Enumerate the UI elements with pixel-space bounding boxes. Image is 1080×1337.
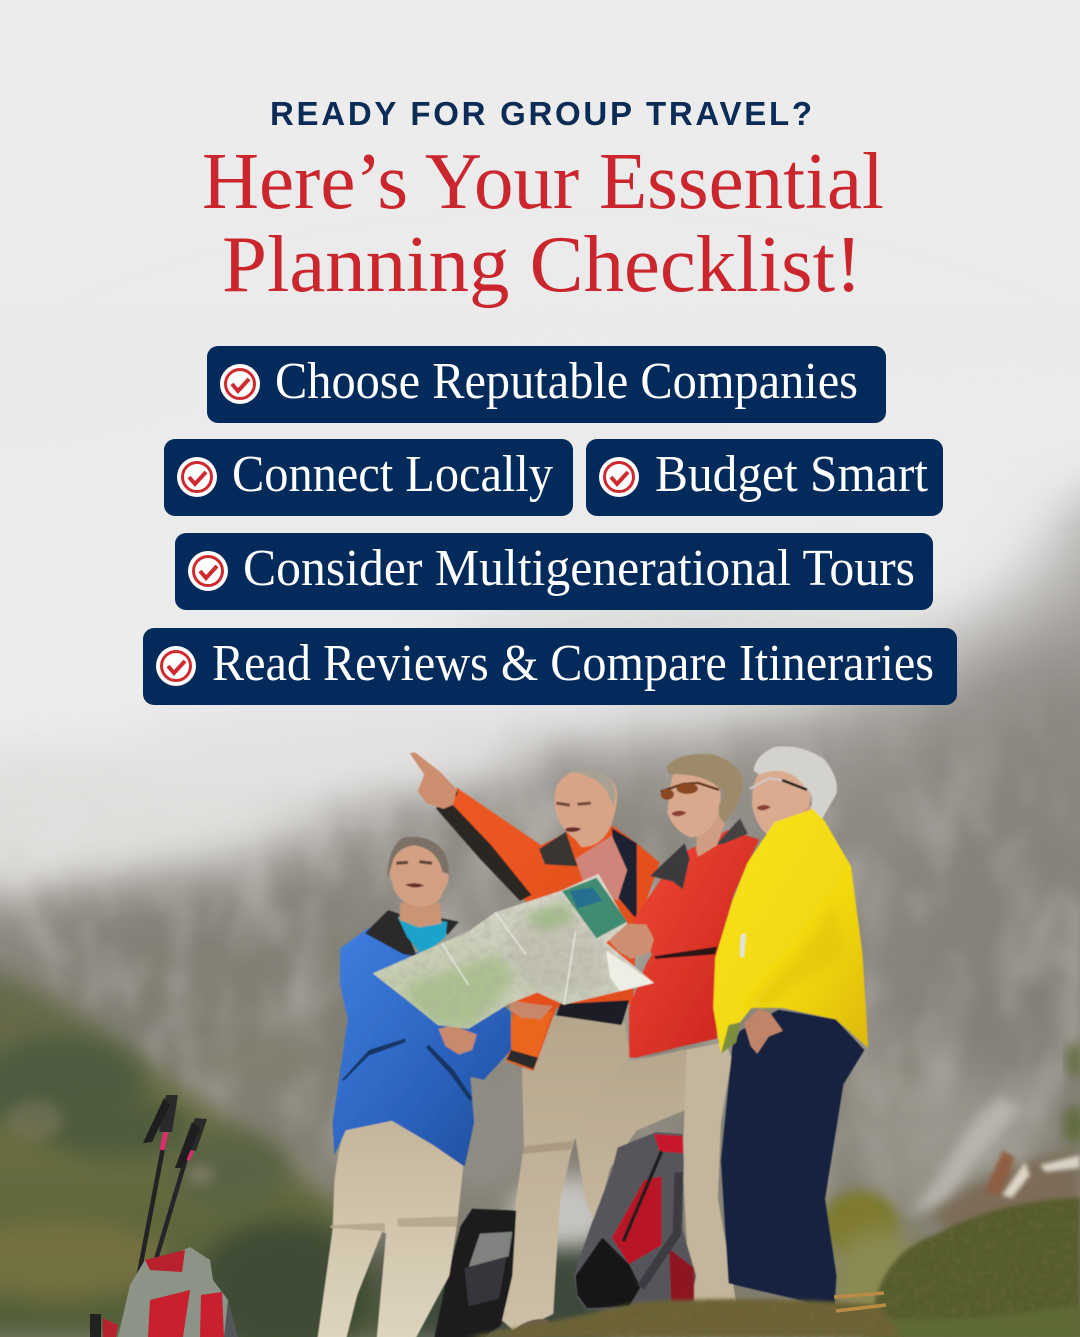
shrubs and deadwood right [822, 1042, 1080, 1337]
distant mountain range [0, 450, 1080, 1337]
subtitle: READY FOR GROUP TRAVEL? [270, 95, 812, 132]
blue jacket man [317, 837, 511, 1337]
checklist pill: Budget Smart [586, 439, 943, 516]
checklist pill: Budget Smart: Budget Smart [655, 446, 929, 503]
fog banks [0, 460, 1080, 911]
grass foreground [465, 1293, 900, 1337]
checklist pill: Read Reviews & Compare Itineraries [143, 628, 957, 705]
folded map [373, 874, 654, 1029]
title [202, 138, 884, 309]
checklist pill: Connect Locally [164, 439, 573, 516]
dark backpack [434, 1209, 516, 1337]
trekking poles and red backpack [90, 1095, 238, 1337]
checklist pill: Connect Locally: Connect Locally [232, 446, 553, 503]
checklist pill: Consider Multigenerational Tours [175, 533, 933, 610]
checklist pill: Consider Multigenerational Tours: Consider Multigenerational Tours [243, 540, 915, 597]
center man [410, 752, 660, 1337]
green hillside left [0, 950, 400, 1337]
title: Here’s Your Essential [202, 138, 884, 226]
valley behind the legs [380, 1070, 610, 1337]
checklist pill: Choose Reputable Companies: Choose Reputable Companies [275, 353, 858, 410]
four hikers reading a map [317, 746, 868, 1337]
background: misty mountain landscape [0, 474, 1080, 1337]
red jacket woman [576, 754, 759, 1310]
checklist pill: Read Reviews & Compare Itineraries: Read Reviews & Compare Itineraries [212, 635, 934, 692]
checklist pill: Choose Reputable Companies [207, 346, 886, 423]
red and grey backpack [574, 1132, 696, 1310]
pointing hand [410, 752, 457, 809]
title: Planning Checklist! [222, 221, 862, 309]
navy trousers and yellow fleece woman [713, 746, 868, 1312]
